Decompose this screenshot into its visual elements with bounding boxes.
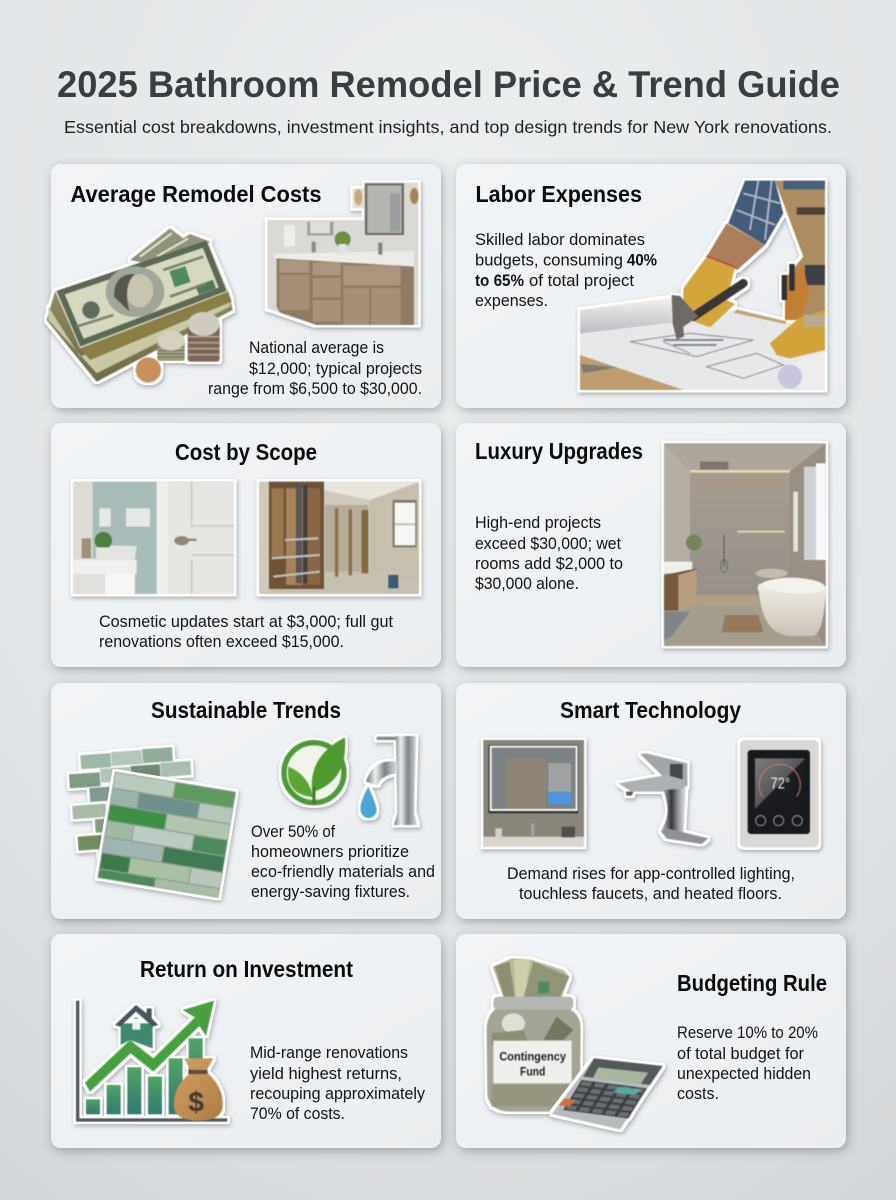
text block: range from $6,500 to $30,000.: [208, 380, 422, 398]
text block: recouping approximately: [250, 1085, 426, 1103]
text block: budgets, consuming: [475, 252, 623, 270]
icon: smart thermostat: 72°: [771, 775, 790, 792]
panel: cost by scope: [51, 423, 441, 667]
photo: worker with hammer on blueprints: [580, 181, 825, 390]
text block: to 65%: [475, 272, 524, 290]
icon: touchless faucet: [618, 753, 708, 844]
text block: rooms add $2,000 to: [475, 555, 623, 573]
title: 2025 Bathroom Remodel Price & Trend Guide: [57, 64, 840, 105]
text block: [475, 514, 623, 593]
panel: average remodel costs: [47, 164, 441, 408]
icon: front sheet of green tile: [97, 772, 236, 898]
heading: sustainable trends: Sustainable Trends: [151, 697, 341, 723]
panel: labor expenses: [456, 164, 846, 408]
heading: luxury upgrades: Luxury Upgrades: [475, 438, 643, 464]
text block: High-end projects: [475, 514, 601, 532]
icon: smart thermostat: [740, 740, 819, 847]
text block: Reserve 10% to 20%: [677, 1024, 818, 1042]
text block: energy-saving fixtures.: [251, 883, 410, 901]
photo: gutted room: [259, 482, 419, 594]
text block: [208, 339, 422, 398]
icon: contingency fund jar: Contingency: [499, 1050, 566, 1063]
text block: $12,000; typical projects: [249, 360, 422, 378]
text block: renovations often exceed $15,000.: [99, 633, 344, 651]
text block: of total budget for: [677, 1045, 805, 1063]
text block: expenses.: [475, 292, 548, 310]
icon: contingency fund jar: Fund: [520, 1066, 545, 1079]
panel: sustainable trends: [51, 683, 441, 919]
text block: exceed $30,000; wet: [475, 535, 621, 553]
photo: smart mirror: [483, 740, 584, 847]
text block: homeowners prioritize: [251, 843, 409, 861]
subtitle: Essential cost breakdowns, investment insights, and top design trends for New York renovations.: [64, 117, 832, 137]
panel: budgeting rule: [456, 934, 846, 1148]
text block: eco-friendly materials and: [251, 863, 435, 881]
chart: growth bars with arrow, house and money bag: [78, 1001, 227, 1121]
icon: eco leaf badge: [284, 737, 345, 804]
text block: [475, 231, 657, 310]
text block: Mid-range renovations: [250, 1044, 408, 1062]
heading: return on investment: Return on Investment: [140, 956, 353, 982]
text block: unexpected hidden: [677, 1065, 811, 1083]
text block: of total project: [529, 272, 634, 290]
text block: touchless faucets, and heated floors.: [519, 885, 782, 903]
bars: [86, 1038, 203, 1114]
text block: 70% of costs.: [250, 1105, 345, 1123]
icon: contingency fund jar: [487, 958, 581, 1112]
text block: costs.: [677, 1085, 719, 1103]
photo: cosmetic update: [73, 482, 234, 594]
text block: [507, 865, 795, 903]
text block: $30,000 alone.: [475, 575, 579, 593]
text block: [677, 1024, 818, 1103]
photo: bathroom vanity: [267, 183, 419, 325]
text block: Over 50% of: [251, 823, 335, 841]
heading: labor expenses: Labor Expenses: [476, 181, 642, 207]
text block: [99, 613, 393, 651]
icon: money bag: [174, 1058, 223, 1121]
photo: luxury bathroom: [664, 443, 826, 646]
text block: Demand rises for app-controlled lighting,: [507, 865, 795, 883]
heading: average remodel costs: Average Remodel Costs: [70, 181, 322, 207]
heading: budgeting rule: Budgeting Rule: [677, 970, 827, 996]
arrow: rising trend: [85, 1001, 214, 1092]
text block: yield highest returns,: [250, 1065, 402, 1083]
text block: [250, 1044, 426, 1123]
text block: [251, 823, 435, 901]
heading: cost by scope: Cost by Scope: [175, 439, 317, 465]
text block: National average is: [249, 339, 384, 357]
icon: calculator: [552, 1058, 663, 1129]
panel: luxury upgrades: [456, 423, 846, 667]
icon: house: [115, 1005, 158, 1048]
icon: faucet with water drop: [360, 736, 417, 825]
icon: money bag: $: [188, 1087, 204, 1118]
text block: 40%: [627, 252, 657, 270]
panel: return on investment: [51, 934, 441, 1148]
heading: smart technology: Smart Technology: [560, 697, 741, 723]
text block: Skilled labor dominates: [475, 231, 645, 249]
icon: stack of hundred dollar bills: [47, 228, 233, 383]
icon: back sheet of green tile: [68, 746, 197, 866]
text block: Cosmetic updates start at $3,000; full gut: [99, 613, 393, 631]
panel: smart technology: [456, 683, 846, 919]
